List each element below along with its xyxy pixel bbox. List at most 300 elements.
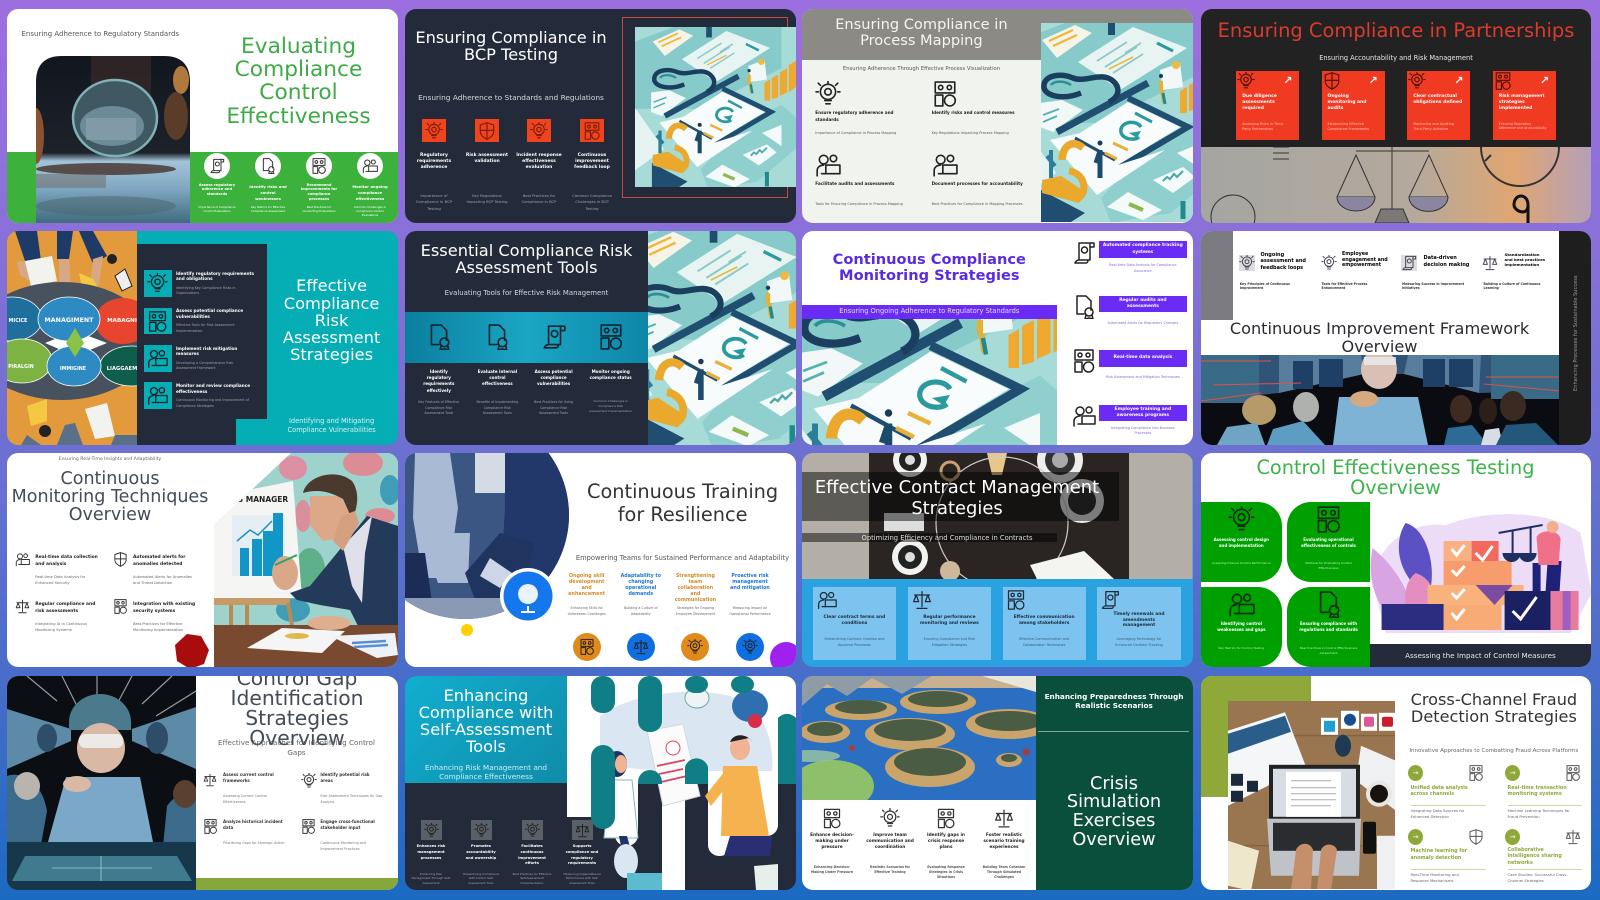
- item: engagement: Enhancement: [1322, 286, 1345, 290]
- item: continuous: Testing: [586, 207, 598, 211]
- panel: Crisis Simulation Exercises Overview: [802, 676, 1192, 890]
- item: monitor: Monitor and review compliance: [176, 383, 250, 388]
- item: improvement: Facilitates: [521, 844, 543, 848]
- item: improvements: [301, 153, 338, 212]
- dark panel: [137, 244, 267, 445]
- title: Detection Strategies: [1411, 707, 1577, 726]
- item: assess: Compliance Risk: [540, 406, 567, 410]
- subtitle: Empowering Teams for Sustained Performance and Adaptability: [576, 554, 789, 562]
- item: collaborative intelligence: Collaborative: [1508, 847, 1544, 853]
- item: incident: evaluation: [526, 165, 552, 170]
- card: ongoing monitoring: monitoring and: [1328, 100, 1366, 105]
- panel: Evaluating Compliance Control Effectiveness: [7, 8, 398, 222]
- item: risk assessment: [466, 119, 508, 204]
- item: gaps: Strategies in Crisis: [929, 870, 963, 874]
- card: terms: Approval Processes: [838, 643, 871, 647]
- item: improvement: [506, 820, 558, 888]
- card: renewals: [1097, 587, 1181, 660]
- title: [1036, 774, 1192, 850]
- item: risks: Identify risks and: [249, 184, 287, 188]
- item: risk mitigation: management: [732, 580, 768, 585]
- title: Strategies: [911, 498, 1003, 519]
- teal band: [405, 312, 648, 363]
- item: evaluate: Assessment Tools: [483, 411, 512, 415]
- item: monitor: Monitor ongoing: [592, 369, 630, 374]
- item: decision-making: Enhancing Decision-: [814, 865, 850, 869]
- tile: operational: Methods for Evaluating Control: [1305, 561, 1352, 565]
- item: incident: Best Practices for: [523, 194, 555, 198]
- panel: Control Gap Identification Strategies Overview: [7, 676, 398, 890]
- item: collaborative intelligence: Case Studies: Successful Cross-: [1508, 872, 1568, 876]
- item: risk mitigation: and mitigation: [730, 586, 770, 591]
- title: Control Effectiveness Testing: [1256, 456, 1535, 479]
- item: risk assessment: Impacting BCP Testing: [466, 200, 508, 204]
- card: ongoing monitoring: Establishing Effective: [1328, 122, 1364, 126]
- item: collaboration: team: [688, 580, 702, 585]
- item: risk assessment: validation: [474, 159, 500, 164]
- item: audits: Tools for Ensuring Compliance in Process Mapping: [815, 202, 903, 206]
- item: gaps: [919, 806, 973, 882]
- card: ongoing monitoring: Ongoing: [1328, 94, 1349, 99]
- tile: operational: Evaluating operational: [1303, 537, 1354, 542]
- subtitle band: Assessing the Impact of Control Measures: [1405, 651, 1556, 660]
- item: adherence: standards: [207, 192, 227, 196]
- title: Assessment: [283, 328, 380, 347]
- card: ongoing monitoring: [1322, 70, 1384, 140]
- image: management meeting table: MABAGNI: [107, 318, 137, 324]
- item: accountability: Streamlining Compliance: [463, 872, 499, 876]
- item: adaptability: Building a Culture of: [624, 606, 658, 610]
- panel: Continuous Improvement Framework Overview: [1200, 231, 1591, 445]
- card: communication: Effective communication: [1014, 615, 1075, 620]
- item: evaluate: Compliance Risk: [484, 406, 511, 410]
- item: regulatory: Importance of Compliance in Process Mapping: [815, 131, 896, 135]
- item: improvements: compliance: [308, 192, 330, 196]
- item: engagement: empowerment: [1342, 263, 1381, 268]
- tile: design: and implementation: [1219, 543, 1264, 548]
- item: real-time monitoring: [1505, 764, 1585, 822]
- item: evaluate: Benefits of Implementing: [477, 400, 518, 404]
- icon: [522, 820, 542, 840]
- item: improvement: efforts: [525, 861, 539, 865]
- item: risk assessment: Risk assessment: [466, 153, 508, 158]
- card: terms: [813, 587, 896, 660]
- card: due diligence: assessments: [1242, 100, 1275, 105]
- item: gaps: Identify gaps in: [927, 833, 965, 838]
- item: improvements: Conducting Evaluations: [302, 208, 336, 212]
- subtitle: Ensuring Real-Time Insights and Adaptability: [59, 457, 161, 462]
- subtitle band: [1370, 644, 1591, 667]
- tile: operational: [1287, 502, 1370, 582]
- tile: weaknesses: Identifying control: [1221, 621, 1262, 626]
- item: identify: Identify regulatory requirements: [176, 270, 254, 276]
- card: performance: Regular performance: [923, 615, 976, 620]
- card: clear obligations: obligations defined: [1413, 100, 1462, 105]
- item: incident data: data: [223, 825, 233, 830]
- item: audits: Regular audits and: [1119, 298, 1167, 303]
- item: standardization: Standardization: [1504, 252, 1540, 256]
- image: futuristic woman at holographic table: [7, 676, 196, 890]
- card: performance: monitoring and reviews: [920, 621, 979, 626]
- item: regular compliance: Regular compliance and: [35, 602, 95, 607]
- card: risk strategies: Risk management: [1499, 94, 1544, 99]
- title: Risk: [315, 311, 348, 330]
- item: monitor: effectiveness: [356, 196, 384, 200]
- title: Continuous: [60, 469, 160, 489]
- item: standardization: [1482, 253, 1560, 291]
- item: monitor: Compliance Control: [356, 208, 384, 212]
- item: regular compliance: Integrating AI in Continuous: [35, 622, 87, 626]
- item: tracking: systems: [1133, 250, 1153, 254]
- item: integration: [112, 597, 208, 635]
- vertical caption: Enhancing Processes for Sustainable Success: [1572, 275, 1578, 391]
- item: incident: [516, 119, 562, 204]
- item: frameworks: frameworks: [223, 778, 250, 783]
- item: real-time monitoring: Real-time transaction: [1508, 784, 1567, 790]
- title: Identification: [230, 686, 363, 710]
- title: Monitoring Techniques: [12, 487, 208, 507]
- item: skill development: [560, 573, 614, 662]
- title: Control: [259, 80, 338, 105]
- panel: Essential Compliance Risk Assessment Tools: [405, 231, 796, 445]
- item: communication: Improve team: [873, 833, 907, 838]
- subtitle: Ensuring Accountability and Risk Management: [1319, 54, 1473, 62]
- title: Ensuring Compliance in Partnerships: [1218, 18, 1574, 42]
- subtitle: Ensuring Adherence Through Effective Process Visualization: [843, 66, 1000, 72]
- item: scenario training: Foster realistic: [986, 833, 1022, 838]
- icon: [144, 308, 172, 334]
- panel: Ensuring Compliance in BCP Testing: [405, 8, 796, 222]
- item: monitor: [589, 324, 632, 413]
- item: regulatory: Measuring Organizational: [563, 872, 600, 876]
- title: [197, 668, 397, 748]
- card: communication: Collaboration Techniques: [1023, 643, 1065, 647]
- item: identify: Key Features of Effective: [418, 400, 459, 404]
- item: incident data: Analyze historical incident: [223, 818, 283, 824]
- title: Strategies: [245, 706, 349, 730]
- card: performance: Mitigation Strategies: [932, 643, 967, 647]
- item: enhances risk: processes: [421, 856, 441, 860]
- title: [802, 477, 1112, 520]
- item: engagement: Employee: [1342, 252, 1368, 257]
- item: risks: control: [260, 190, 276, 194]
- card: due diligence: Due diligence: [1242, 94, 1277, 99]
- item: decision-making: making under: [815, 839, 849, 844]
- icon: [422, 118, 446, 142]
- item: monitor: Monitor ongoing: [352, 184, 388, 188]
- item: regulatory: Supports: [573, 844, 591, 848]
- item: monitor: effectiveness: [176, 388, 207, 394]
- item: unified data: across channels: [1410, 791, 1454, 797]
- item: accountability: [455, 820, 507, 888]
- title: Effective: [296, 276, 367, 295]
- item: adaptability: Adaptability to: [621, 574, 661, 579]
- item: risk areas: [301, 770, 397, 808]
- item: risks: [932, 81, 1015, 135]
- title: [405, 687, 567, 755]
- item: assess: Effective Tools for Risk Assessment: [176, 323, 235, 327]
- card: due diligence: Assessing Risks in Third-: [1242, 122, 1284, 126]
- item: assess: Best Practices for Using: [534, 400, 573, 404]
- item: identify: Identifying Key Compliance Risks in: [176, 286, 236, 290]
- item: evaluate: control: [489, 375, 506, 380]
- card: due diligence: Party Partnerships: [1242, 127, 1273, 131]
- item: real-time monitoring: Machine Learning Techniques for: [1508, 808, 1570, 813]
- image: laptop on wooden desk: [1228, 701, 1395, 889]
- title: [7, 470, 213, 525]
- item: identify: Assessment Tools: [424, 411, 453, 415]
- item: training: Processes: [1134, 431, 1151, 435]
- item: decision-making: [805, 806, 859, 882]
- icon: [1238, 254, 1254, 270]
- item: assessment: Ongoing: [1260, 252, 1284, 258]
- item: standardization: implementation: [1504, 262, 1539, 267]
- item: tracking: Real-time Data Analysis for Compliance: [1109, 263, 1176, 267]
- item: risk areas: Analysis: [320, 800, 334, 804]
- icon: [1505, 828, 1520, 844]
- card: clear obligations: Monitoring and Auditing: [1413, 122, 1454, 126]
- item: collaboration: Strengthening: [676, 574, 715, 579]
- item: adaptability: demands: [628, 592, 653, 597]
- item: gaps: crisis response: [928, 839, 964, 844]
- title: Effective Contract Management: [815, 477, 1099, 498]
- image: manager presenting a chart: S MANAGER: [238, 495, 288, 504]
- card: risk strategies: implemented: [1499, 106, 1532, 111]
- title: Evaluating: [241, 34, 356, 59]
- subtitle: Enhancing Risk Management and: [425, 763, 547, 772]
- tile: weaknesses: [1200, 587, 1282, 667]
- item: standardization: Building a Culture of Continuous: [1484, 282, 1540, 286]
- icon: [1408, 764, 1423, 780]
- item: integration: Integration with existing: [133, 602, 195, 607]
- icon: [470, 820, 492, 840]
- item: accountability: with Control Self-: [469, 876, 493, 880]
- item: unified data: Integrating Data Sources for: [1410, 808, 1464, 813]
- item: automated alerts: anomalies detected: [133, 562, 182, 567]
- icon: →: [1413, 832, 1418, 840]
- item: standardization: Learning: [1484, 286, 1499, 290]
- item: assessment: assessment and: [1260, 258, 1306, 264]
- title: [226, 34, 371, 129]
- item: assess: vulnerabilities: [176, 314, 210, 319]
- item: audits: Facilitate audits and assessments: [815, 181, 895, 186]
- card: terms: Clear contract terms and: [824, 615, 885, 620]
- icon: [144, 345, 172, 372]
- side strip: [1558, 231, 1592, 445]
- green bar: [196, 878, 398, 890]
- frame: [622, 17, 788, 198]
- card: due diligence: required: [1242, 106, 1264, 111]
- card: risk strategies: Adherence and Accountability: [1499, 126, 1547, 130]
- item: identify: and obligations: [176, 276, 213, 281]
- item: scenario training: Building Team Cohesion: [983, 865, 1025, 869]
- item: evaluate: Evaluate internal: [478, 369, 517, 374]
- item: communication: [863, 806, 917, 882]
- item: regulatory: Ensure regulatory adherence and: [815, 110, 893, 115]
- card: renewals: Enhanced Contract Tracking: [1115, 643, 1163, 647]
- green side panel: [1036, 676, 1193, 890]
- item: scenario training: [977, 806, 1031, 882]
- item: tracking: Automated compliance tracking: [1103, 243, 1183, 248]
- item: decision-making: Enhance decision-: [810, 833, 854, 838]
- item: continuous: [572, 119, 612, 211]
- subtitle: Compliance Vulnerabilities: [288, 426, 376, 434]
- item: regulatory: compliance and: [566, 850, 598, 854]
- subtitle band: Ensuring Ongoing Adherence to Regulatory Standards: [839, 307, 1019, 315]
- icon: [144, 270, 172, 297]
- item: monitor: Compliance Strategies: [176, 404, 214, 408]
- item: evaluate: [476, 324, 518, 415]
- card: risk strategies: [1493, 70, 1556, 140]
- card: performance: [908, 587, 991, 660]
- item: communication: coordination: [875, 845, 905, 850]
- icon: [255, 153, 281, 179]
- item: improvement: Self-Assessment: [520, 876, 544, 880]
- icon: [822, 806, 842, 830]
- item: monitor: Compliance Risk: [598, 404, 623, 408]
- item: regulatory: Performance with Self-: [566, 876, 598, 880]
- item: regulatory: requirements: [568, 861, 596, 865]
- item: risk areas: areas: [320, 778, 333, 783]
- title: Strategies: [290, 345, 373, 364]
- item: identify: effectively: [427, 388, 451, 393]
- item: risks: Key Regulations Impacting Process Mapping: [932, 131, 1009, 135]
- card: clear obligations: ↗: [1454, 74, 1463, 86]
- title: Monitoring Strategies: [839, 267, 1020, 284]
- tile: operational: Effectiveness: [1319, 566, 1339, 570]
- icon: [527, 118, 551, 142]
- tile: design: [1200, 502, 1282, 582]
- item: risk mitigation: Measuring Impact on: [733, 606, 767, 610]
- panel: Cross-Channel Fraud Detection Strategies: [1200, 676, 1591, 890]
- item: incident data: [203, 816, 297, 854]
- item: tracking: Assurance: [1134, 269, 1152, 273]
- item: stakeholder input: stakeholder input: [320, 825, 360, 830]
- item: enhances risk: management: [417, 850, 445, 854]
- icon: [880, 806, 900, 830]
- item: risk areas: Risk Assessment Techniques for Gap: [320, 794, 382, 798]
- item: evaluate: effectiveness: [482, 381, 513, 386]
- image: management meeting table: PIRALGIN: [8, 364, 34, 370]
- icon: [1482, 254, 1498, 270]
- image: person weighing checked boxes: [1370, 502, 1591, 644]
- card: due diligence: ↗: [1283, 74, 1292, 86]
- item: risk mitigation: Operational Performance: [729, 612, 771, 616]
- item: machine learning: Response Mechanisms: [1410, 878, 1454, 883]
- item: regulatory: Assessment Tools: [569, 881, 595, 885]
- icon: [1400, 254, 1416, 270]
- image: management meeting table: IMMIGINE: [60, 366, 86, 372]
- card: due diligence: [1236, 70, 1299, 140]
- panel: Continuous Compliance Monitoring Strategies: [802, 231, 1192, 445]
- tile: regulations: regulations and standards: [1299, 627, 1358, 632]
- item: adherence: Importance of Compliance: [199, 204, 235, 208]
- item: assessment: Improvement: [1240, 286, 1263, 290]
- item: incident data: Prioritizing Gaps for Strategic Action: [223, 840, 285, 844]
- card: ongoing monitoring: audits: [1328, 106, 1343, 111]
- title: Essential Compliance Risk: [421, 241, 632, 260]
- image: manager presenting a chart: [214, 453, 398, 667]
- purple corner shape: [770, 642, 802, 674]
- item: decision-making: pressure: [821, 845, 843, 850]
- item: monitor: Common Challenges in: [354, 204, 386, 208]
- item: skill development: Unforeseen Challenges: [568, 612, 606, 616]
- image: clinicians among capsule bars: [567, 676, 796, 890]
- item: regulatory: [556, 820, 608, 888]
- image: desk with targets and notebook: [802, 453, 1192, 579]
- card: renewals: Timely renewals and: [1113, 612, 1165, 617]
- tile: design: Analyzing Internal Control Performance: [1212, 561, 1271, 565]
- item: machine learning: Machine learning for: [1410, 848, 1467, 854]
- item: real-time monitoring: Fraud Prevention: [1508, 814, 1540, 819]
- item: implement: [144, 345, 238, 372]
- item: regulatory: [416, 119, 452, 211]
- title: [283, 276, 380, 364]
- item: improvement: improvement: [518, 856, 546, 860]
- subtitle: Optimizing Efficiency and Compliance in Contracts: [862, 534, 1032, 542]
- item: regulatory: Regulatory: [420, 153, 448, 158]
- item: monitor: Assessment Implementation: [589, 409, 632, 413]
- item: data-driven: Data-driven: [1424, 255, 1457, 261]
- card: ongoing monitoring: ↗: [1368, 74, 1378, 86]
- item: risks: [249, 153, 287, 212]
- item: enhances risk: Management Through Self-: [411, 876, 451, 880]
- panel: Ensuring Compliance in Partnerships: [1200, 8, 1591, 222]
- icon: →: [1510, 832, 1515, 840]
- item: decision-making: Making Under Pressure: [811, 870, 853, 874]
- tile: design: Assessing control design: [1214, 537, 1269, 542]
- subtitle: Enhancing Preparedness Through: [1045, 692, 1183, 701]
- card: terms: Streamlining Contract Creation and: [824, 637, 884, 641]
- image: training session in duotone circle: [405, 453, 569, 619]
- title: Overview: [1072, 830, 1156, 850]
- title: Tools: [466, 737, 506, 756]
- item: identify: [144, 270, 254, 297]
- item: adherence: Assess regulatory: [199, 182, 235, 186]
- icon: [681, 633, 709, 661]
- item: regular compliance: risk assessments: [35, 609, 78, 614]
- title: [835, 16, 1008, 49]
- title: Process Mapping: [860, 32, 983, 49]
- image: management meeting table: MICICE: [9, 318, 27, 324]
- header band: [802, 8, 1193, 60]
- item: regular compliance: Monitoring Systems: [35, 628, 72, 632]
- item: communication: communication and: [866, 839, 914, 844]
- item: regulatory: adherence: [421, 165, 447, 170]
- item: data collection: Enhanced Security: [35, 581, 70, 585]
- item: adaptability: changing: [628, 580, 653, 585]
- panel: Effective Contract Management Strategies: [802, 453, 1192, 667]
- item: skill development: development: [569, 580, 604, 585]
- item: collaboration: and: [690, 592, 700, 597]
- subtitle: Realistic Scenarios: [1075, 701, 1153, 710]
- subtitle: [196, 738, 397, 758]
- item: collaborative intelligence: Channel Strategies: [1508, 878, 1544, 883]
- item: risks: Compliance Assessment: [251, 208, 285, 212]
- item: real-time: [1074, 349, 1187, 378]
- item: collaborative intelligence: intelligence sharing: [1508, 853, 1562, 859]
- title: Cross-Channel Fraud: [1411, 690, 1577, 708]
- panel: Enhancing Compliance with Self-Assessment Tools: [405, 676, 796, 890]
- tile: regulations: Assessment: [1320, 651, 1338, 655]
- item: identify: Identify: [430, 369, 448, 374]
- item: monitor: Common Challenges in: [593, 399, 628, 403]
- item: accountability: accountability: [466, 850, 496, 854]
- card: risk strategies: Ensuring Regulatory: [1499, 122, 1531, 126]
- item: stakeholder input: Continuous Monitoring and: [320, 840, 366, 844]
- item: data-driven: [1400, 253, 1480, 291]
- item: automated alerts: [112, 550, 208, 588]
